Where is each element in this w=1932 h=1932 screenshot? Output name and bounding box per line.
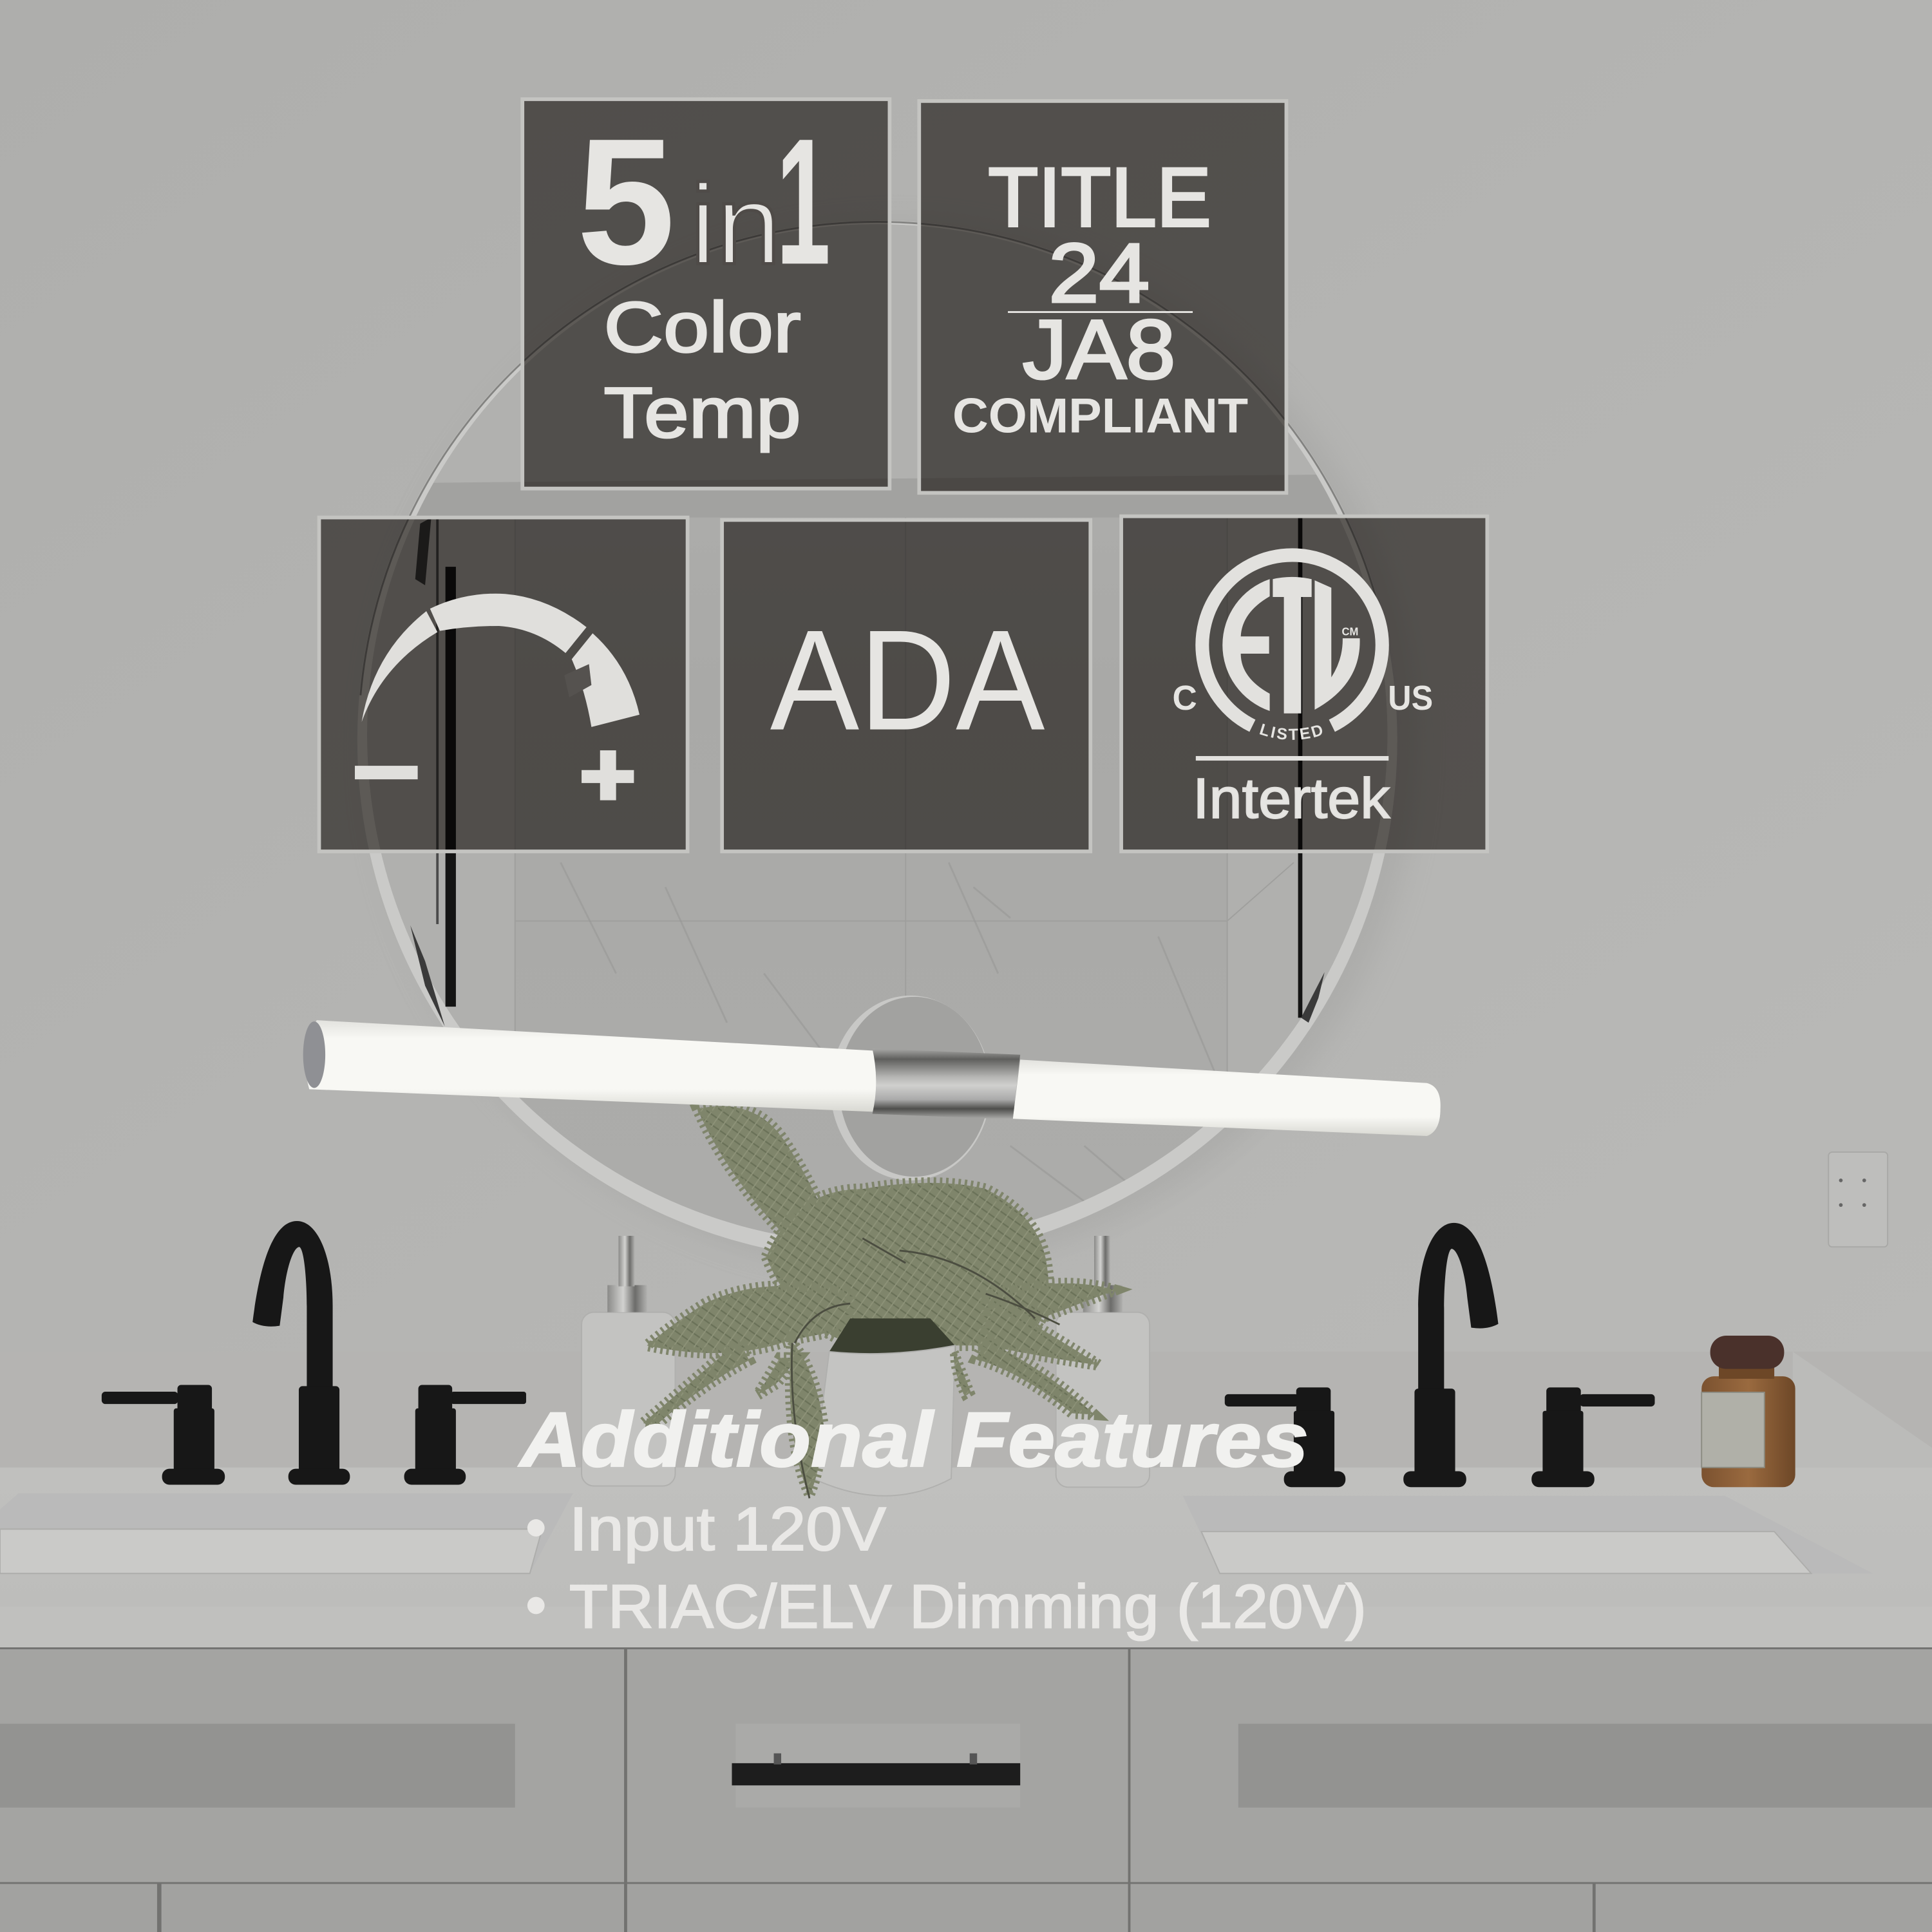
panel: 5 in 1 color temp: Temp — [603, 373, 801, 453]
panel: ADA — [722, 520, 1090, 851]
additional features text: Additional Features — [518, 1396, 1309, 1483]
icon: ETL mark — [1172, 548, 1433, 830]
panel: 5 in 1 color temp — [522, 99, 889, 489]
panel: Title 24 JA8 compliant: COMPLIANT — [952, 389, 1248, 444]
light fixture — [303, 1020, 1441, 1136]
panel: 5 in 1 color temp: Color — [603, 287, 801, 367]
additional features text — [518, 1396, 1367, 1641]
panel: Title 24 JA8 compliant — [919, 101, 1286, 493]
panel: ETL listed — [1119, 514, 1489, 853]
plant soil — [829, 1318, 955, 1356]
icon: ETL mark: LISTED — [1260, 724, 1323, 740]
icon: ETL mark: Intertek — [1193, 766, 1390, 830]
panel: Title 24 JA8 compliant: TITLE — [988, 150, 1211, 244]
panel: 5 in 1 color temp: 1 — [776, 101, 831, 302]
vanity cabinets — [0, 1647, 1932, 1932]
panel: 5 in 1 color temp: in — [690, 162, 781, 288]
round mirror — [357, 220, 1397, 1249]
panel: Title 24 JA8 compliant: 24 — [1048, 226, 1150, 320]
panel: ADA: ADA — [770, 601, 1045, 761]
soap dispensers — [582, 1236, 1150, 1487]
fern behind pot — [643, 1106, 1115, 1426]
icon: ETL mark: C — [1172, 679, 1197, 717]
panel: 5 in 1 color temp: 5 — [576, 101, 675, 302]
icon: ETL mark: CM — [1342, 625, 1358, 638]
additional features text: Input 120V — [569, 1495, 886, 1564]
backsplash and counter — [0, 1352, 1932, 1649]
fern drooping frond — [790, 1238, 1059, 1499]
background: bathroom wall — [0, 0, 1932, 1356]
white plant pot — [813, 1345, 955, 1496]
right faucet set — [1225, 1223, 1655, 1487]
amber jar — [1701, 1336, 1795, 1487]
icon: ETL mark: US — [1388, 679, 1433, 717]
wall sconce back plate — [831, 996, 990, 1180]
icon: dimmer gauge — [355, 594, 639, 800]
panel: Title 24 JA8 compliant: JA8 — [1023, 302, 1175, 396]
drawer pull — [732, 1754, 1020, 1785]
left faucet set — [102, 1221, 526, 1484]
additional features text: TRIAC/ELV Dimming (120V) — [569, 1572, 1367, 1641]
panel: dimming — [319, 518, 688, 851]
wall outlet — [1828, 1152, 1888, 1247]
